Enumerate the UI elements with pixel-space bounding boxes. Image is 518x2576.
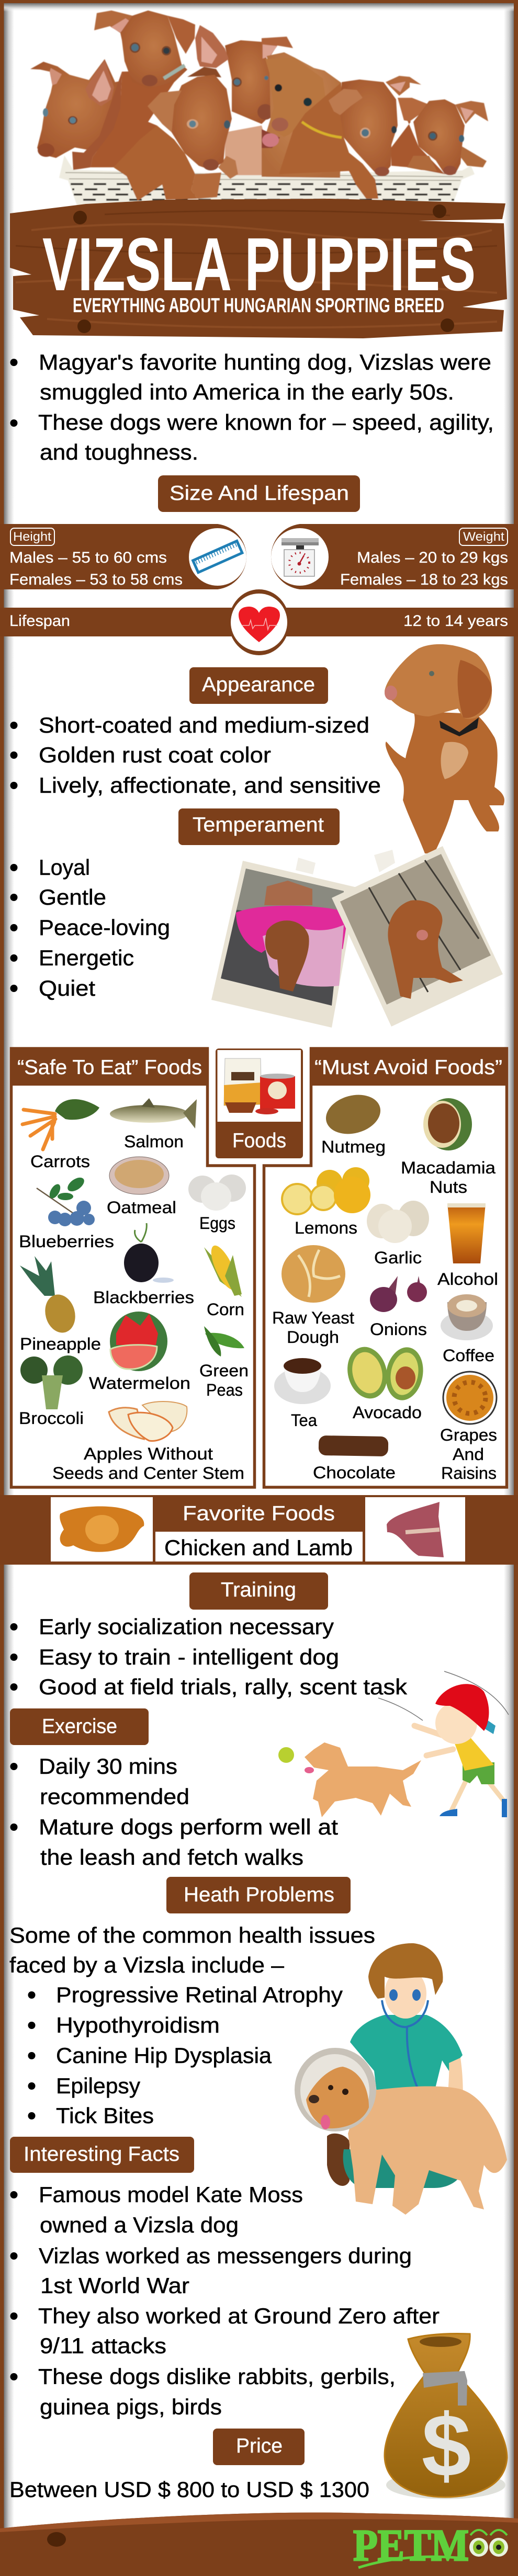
food: broccoli: Broccoli (19, 1409, 84, 1428)
interesting facts bullet list: These dogs dislike rabbits, gerbils, (38, 2364, 396, 2389)
lifespan band (0, 589, 518, 655)
food: apples: Seeds and Center Stem (52, 1464, 244, 1483)
panel: safe to eat foods (10, 1048, 254, 1487)
weight values: Males – 20 to 29 kgs (357, 549, 508, 566)
avoid foods header text: “Must Avoid Foods” (314, 1056, 502, 1079)
food: green peas (199, 1326, 249, 1399)
food: garlic: Garlic (374, 1248, 422, 1267)
food: corn (204, 1243, 244, 1319)
weight band (271, 524, 518, 589)
food: watermelon (89, 1312, 190, 1393)
health problems bullet list: Progressive Retinal Atrophy (56, 1982, 343, 2007)
food: lemons: Lemons (295, 1218, 357, 1237)
illustration: vet with dog in cone (295, 1943, 507, 2215)
heading: health problems: Heath Problems (184, 1884, 334, 1906)
heading: size and lifespan: Size And Lifespan (170, 482, 349, 505)
exercise bullet list: Mature dogs perform well at (39, 1815, 338, 1839)
food: carrots (22, 1099, 99, 1171)
food photo: roast chicken (51, 1497, 153, 1561)
weight values: Females – 18 to 23 kgs (340, 571, 508, 588)
health problems intro text (9, 1923, 375, 1977)
food: tea (274, 1358, 331, 1430)
food photo: lamb rack (365, 1497, 465, 1561)
food: carrots: Carrots (30, 1152, 90, 1171)
food: lemons (282, 1167, 370, 1237)
food: salmon: Salmon (124, 1132, 184, 1151)
food: macadamia nuts: Nuts (430, 1178, 467, 1196)
icon: heart with heartbeat (239, 607, 280, 642)
favorite foods value: Chicken and Lamb (164, 1535, 353, 1560)
dog photo: standing vizsla (385, 644, 504, 853)
intro bullet list: These dogs were known for – speed, agility, (38, 410, 494, 435)
dog in cone (295, 2048, 507, 2215)
training bullet list: Easy to train - intelligent dog (39, 1645, 339, 1669)
puppy 4 (195, 25, 293, 175)
temperament bullet list: Energetic (39, 945, 134, 970)
food: apples (52, 1401, 244, 1483)
interesting facts bullet list: Vizlas worked as messengers during (39, 2243, 412, 2268)
logo: petmoo: PETM (353, 2520, 469, 2570)
health problems bullet list: Epilepsy (56, 2073, 140, 2098)
ball (278, 1747, 294, 1763)
heading: training: Training (221, 1579, 296, 1601)
food: green peas: Green (199, 1361, 249, 1380)
title wood sign (10, 199, 507, 338)
exercise bullet list: Daily 30 mins (39, 1754, 177, 1779)
weight tag (459, 528, 508, 545)
height values (9, 549, 183, 588)
heading: appearance (189, 667, 328, 704)
exercise bullet list: recommended (40, 1784, 189, 1809)
favorite foods title: Favorite Foods (183, 1502, 335, 1525)
heading: interesting facts: Interesting Facts (24, 2143, 179, 2165)
vet (327, 1943, 467, 2188)
food: chocolate (313, 1435, 396, 1482)
price text: Between USD $ 800 to USD $ 1300 (9, 2477, 369, 2502)
icon: ruler (189, 528, 246, 586)
food: grapes and raisins (440, 1372, 497, 1483)
panel: foods centre box (216, 1048, 303, 1158)
heading: exercise: Exercise (42, 1715, 117, 1738)
polaroid photo: puppy on wood deck (332, 846, 503, 1027)
temperament bullet list: Quiet (39, 976, 95, 1000)
height band (0, 524, 246, 589)
intro bullet list: and toughness. (40, 440, 198, 464)
food: alcohol (437, 1203, 498, 1289)
heading: size and lifespan (158, 475, 360, 512)
temperament bullet list: Peace-loving (39, 915, 170, 940)
footer wood band (0, 2513, 518, 2576)
heading: health problems (166, 1877, 351, 1913)
interesting facts bullet list (10, 2182, 440, 2419)
lifespan label: Lifespan (9, 612, 70, 630)
temperament bullet list: Loyal (39, 855, 90, 880)
height values: Females – 53 to 58 cms (9, 571, 183, 588)
temperament bullet list (10, 855, 170, 1000)
food: broccoli (19, 1355, 84, 1428)
heading: temperament (178, 808, 340, 845)
food: pineapple (20, 1256, 101, 1353)
training bullet list (10, 1614, 408, 1699)
food: onions: Onions (370, 1320, 427, 1339)
basket (59, 155, 475, 205)
intro bullet list (10, 350, 494, 464)
heading: training (189, 1572, 328, 1610)
heading: exercise (10, 1708, 149, 1745)
weight tag: Weight (463, 530, 504, 544)
intro bullet list: Magyar's favorite hunting dog, Vizslas were (39, 350, 491, 374)
food: grapes and raisins: And (453, 1445, 484, 1464)
puppy 3 (114, 67, 238, 201)
food: blackberries (93, 1223, 194, 1307)
food: macadamia nuts (401, 1098, 496, 1196)
heading: interesting facts (10, 2137, 194, 2173)
heading: appearance: Appearance (202, 674, 315, 696)
puppy 6 (279, 76, 421, 199)
height tag: Height (13, 530, 51, 544)
lifespan value: 12 to 14 years (403, 612, 508, 630)
food: avocado (342, 1343, 427, 1422)
health problems bullet list: Tick Bites (56, 2103, 154, 2128)
health problems bullet list: Hypothyroidism (56, 2013, 220, 2037)
nail (47, 2532, 66, 2547)
appearance bullet list: Short-coated and medium-sized (39, 713, 369, 737)
food: raw yeast dough: Raw Yeast (272, 1308, 354, 1327)
food: salmon (110, 1098, 197, 1151)
nails (73, 204, 454, 333)
food: tea: Tea (291, 1411, 317, 1430)
favorite foods band (0, 1495, 518, 1565)
puppy 7 (391, 98, 488, 175)
food: green peas: Peas (206, 1381, 243, 1399)
intro bullet list: smuggled into America in the early 50s. (40, 380, 454, 404)
panel: must avoid foods (264, 1048, 508, 1487)
food: blueberries (19, 1175, 114, 1251)
food: eggs: Eggs (199, 1214, 235, 1233)
icon: puppy food bag and can (224, 1058, 295, 1114)
food: pineapple: Pineapple (20, 1335, 101, 1353)
hero image: puppies in a basket (30, 10, 488, 205)
food: blackberries: Blackberries (93, 1288, 194, 1307)
safe foods header text: “Safe To Eat” Foods (17, 1056, 202, 1079)
puppy 2 (72, 10, 195, 170)
puppy 5 (262, 52, 341, 178)
food: avocado: Avocado (353, 1403, 422, 1422)
food: apples: Apples Without (84, 1444, 213, 1463)
food: coffee: Coffee (443, 1346, 494, 1365)
food: raw yeast dough: Dough (287, 1328, 339, 1347)
food: alcohol: Alcohol (437, 1270, 498, 1289)
interesting facts bullet list: 1st World War (40, 2273, 189, 2298)
food: corn: Corn (207, 1300, 244, 1319)
height tag (10, 528, 54, 545)
exercise bullet list: the leash and fetch walks (40, 1845, 303, 1870)
health problems intro text: faced by a Vizsla include – (9, 1953, 285, 1977)
temperament bullet list: Gentle (39, 885, 106, 909)
interesting facts bullet list: Famous model Kate Moss (39, 2182, 303, 2207)
illustration: boy throwing ball to dog (278, 1671, 509, 1817)
icon: money bag (385, 2334, 507, 2499)
food: eggs (188, 1175, 246, 1233)
dog (305, 1742, 421, 1817)
polaroid photo: puppy in pink bed (211, 858, 357, 1028)
exercise bullet list (10, 1754, 338, 1870)
food: blueberries: Blueberries (19, 1232, 114, 1251)
food: oatmeal: Oatmeal (107, 1198, 176, 1217)
food: grapes and raisins: Grapes (440, 1426, 497, 1444)
food: nutmeg: Nutmeg (321, 1137, 386, 1156)
health problems bullet list: Canine Hip Dysplasia (56, 2043, 272, 2068)
training bullet list: Early socialization necessary (39, 1614, 334, 1639)
food: chocolate: Chocolate (313, 1463, 396, 1482)
food: raw yeast dough (272, 1245, 354, 1347)
weight values (340, 549, 508, 588)
foods section (10, 1048, 508, 1487)
interesting facts bullet list: guinea pigs, birds (40, 2395, 222, 2419)
heading: price (213, 2429, 305, 2465)
food: macadamia nuts: Macadamia (401, 1158, 496, 1177)
foods label: Foods (232, 1130, 286, 1152)
appearance bullet list: Golden rust coat color (39, 743, 271, 767)
training bullet list: Good at field trials, rally, scent task (39, 1674, 408, 1699)
heading: temperament: Temperament (193, 814, 324, 836)
food: garlic (367, 1201, 429, 1267)
appearance bullet list (10, 713, 381, 797)
heading: price: Price (236, 2435, 283, 2457)
boy (414, 1684, 507, 1817)
icon: money bag: $ (422, 2396, 471, 2495)
interesting facts bullet list: owned a Vizsla dog (40, 2213, 239, 2237)
interesting facts bullet list: 9/11 attacks (40, 2333, 166, 2358)
appearance bullet list: Lively, affectionate, and sensitive (39, 773, 381, 797)
food: coffee (441, 1294, 494, 1365)
health problems intro text: Some of the common health issues (9, 1923, 375, 1947)
health problems bullet list (28, 1982, 343, 2128)
height values: Males – 55 to 60 cms (9, 549, 167, 566)
food: watermelon: Watermelon (89, 1374, 190, 1393)
food: nutmeg (321, 1089, 386, 1156)
puppy 1 (30, 59, 122, 158)
icon: weighing scale (271, 528, 329, 586)
interesting facts bullet list: They also worked at Ground Zero after (38, 2304, 440, 2328)
food: oatmeal (107, 1157, 176, 1217)
food: grapes and raisins: Raisins (441, 1464, 497, 1483)
food: onions (370, 1276, 427, 1339)
